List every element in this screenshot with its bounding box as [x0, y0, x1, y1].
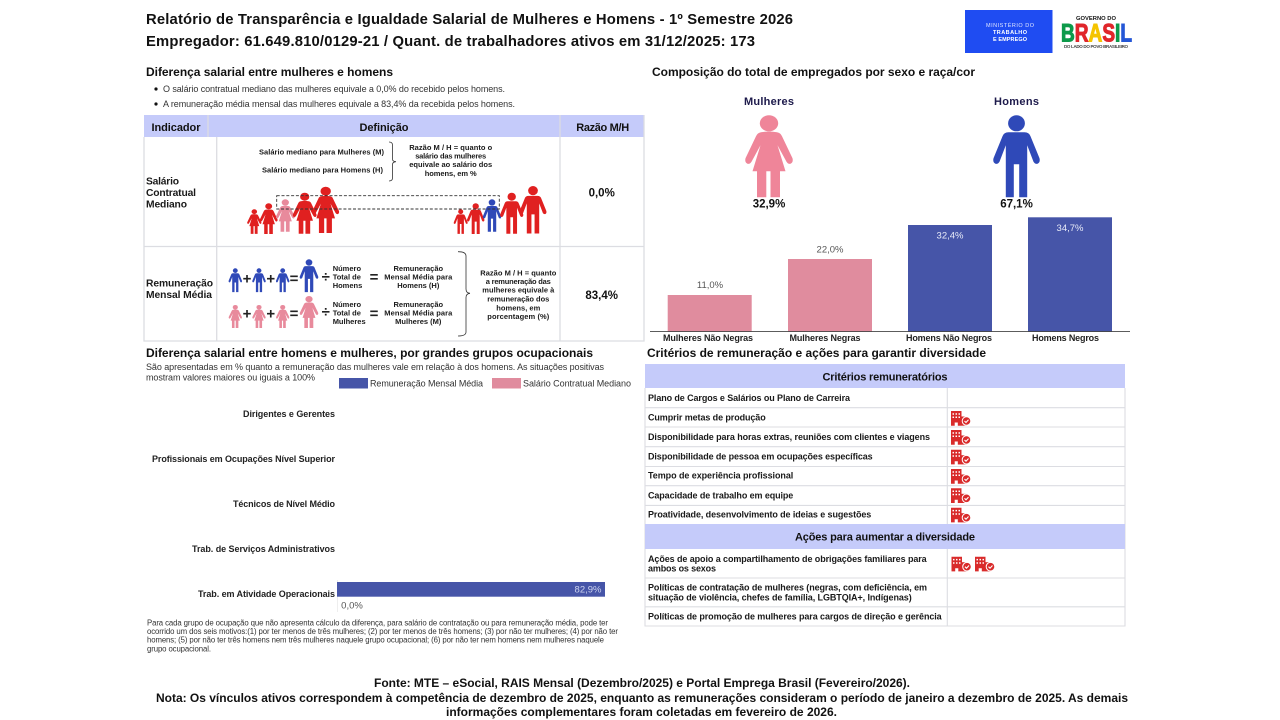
logo: Ministério do Trabalho e Emprego: E EMPREGO	[993, 37, 1028, 43]
bar chart: grupos ocupacionais: Trab. de Serviços Administrativos	[192, 544, 335, 554]
row: proatividade: Proatividade, desenvolvimento de ideias e sugestões	[648, 509, 871, 519]
header: critérios remuneratórios	[645, 364, 1125, 388]
equation: homens: Mensal Média para	[384, 272, 453, 282]
bar chart: grupos ocupacionais: Técnicos de Nível Médio	[233, 499, 336, 509]
icons: homens em fila	[454, 186, 546, 234]
footer: fonte e nota: Nota: Os vínculos ativos correspondem à competência de dezembro de 2025, enquanto as remunerações consideram o período de janeiro a dezembro de 2025. As demais	[156, 691, 1128, 705]
definition labels: salário mediano	[259, 147, 384, 175]
equation: homens: +	[266, 270, 275, 288]
row: trabalho em equipe	[648, 488, 971, 503]
logo: Ministério do Trabalho e Emprego: MINISTÉRIO DO	[986, 22, 1035, 29]
text block: razão salário: Razão M / H = quanto o	[409, 143, 493, 152]
equation: mulheres	[229, 296, 453, 328]
text block: resumo em bullets: O salário contratual mediano das mulheres equivale a 0,0% do recebido pelos homens.	[163, 84, 505, 94]
row: contratação de mulheres: Políticas de contratação de mulheres (negras, com deficiência, em	[648, 582, 927, 592]
bar: mulheres não negras: Mulheres Não Negras	[663, 333, 753, 343]
heading: critérios de remuneração: Critérios de remuneração e ações para garantir diversidade	[647, 346, 986, 360]
bar: mulheres negras: 22,0%	[817, 244, 844, 256]
equation: homens: Total de	[333, 272, 361, 282]
text block: razão remuneração: remuneração dos	[487, 294, 549, 303]
heading: composição: Composição do total de empregados por sexo e raça/cor	[652, 65, 975, 79]
title	[146, 12, 793, 50]
bracket: remuneração	[458, 252, 470, 336]
footnote	[147, 618, 618, 653]
equation: homens: Homens	[333, 281, 362, 290]
text block: razão remuneração: porcentagem (%)	[487, 312, 550, 321]
text block: razão remuneração	[480, 268, 557, 321]
bar: mulheres negras	[788, 244, 872, 343]
text block: razão salário: equivale ao salário dos	[409, 160, 492, 169]
figure: mulheres 32,9%: 32,9%	[753, 198, 785, 210]
header: ações para diversidade	[645, 524, 1125, 549]
bar: remuneração 82,9%	[337, 582, 605, 597]
logo: Governo do Brasil: GOVERNO DO	[1076, 16, 1116, 22]
bracket: salário mediano	[389, 142, 396, 181]
bar: homens negros: Homens Negros	[1032, 333, 1099, 343]
bar: mulheres negras: Mulheres Negras	[790, 333, 860, 343]
panel: tabela de indicadores	[144, 115, 644, 341]
footer: fonte e nota: informações complementares foram coletadas em fevereiro de 2026.	[446, 705, 837, 719]
row label: salário contratual mediano: Salário	[146, 176, 179, 188]
definition labels: salário mediano: Salário mediano para Mulheres (M)	[259, 147, 384, 156]
bar: homens negros: 34,7%	[1057, 223, 1084, 234]
logo: Governo do Brasil: BRASIL	[1061, 20, 1132, 48]
text block: razão remuneração: mulheres equivale à	[482, 286, 555, 295]
equation: mulheres: +	[243, 306, 252, 322]
text block: razão salário	[409, 143, 493, 178]
equation: homens: ÷	[322, 268, 330, 286]
title: Relatório de Transparência e Igualdade Salarial de Mulheres e Homens - 1º Semestre 2026	[146, 12, 793, 28]
row label: salário contratual mediano: Mediano	[146, 200, 187, 210]
equation: mulheres: ÷	[322, 304, 330, 320]
row label: remuneração mensal média	[146, 278, 213, 301]
equation: homens: =	[370, 269, 379, 286]
dashed highlight	[277, 196, 499, 209]
figure: homens 67,1%: Homens	[994, 96, 1039, 108]
row: tempo de experiência: Tempo de experiência profissional	[648, 471, 793, 481]
text block: razão remuneração: homens, em	[496, 303, 541, 312]
equation: mulheres: Total de	[333, 308, 361, 318]
panel: critérios e ações	[645, 364, 1125, 626]
header: critérios remuneratórios: Critérios remuneratórios	[822, 372, 948, 384]
text block: explicação: São apresentadas em % quanto a remuneração das mulheres vale em relação à dos homens. As situações positivas	[146, 362, 604, 372]
table header: Indicador	[152, 122, 201, 134]
bar: mulheres não negras: 11,0%	[697, 280, 724, 291]
row: ocupações específicas: Disponibilidade de pessoa em ocupações específicas	[648, 452, 873, 462]
logo: Governo do Brasil: DO LADO DO POVO BRASILEIRO	[1064, 44, 1128, 49]
value: razão salário: 0,0%	[589, 188, 615, 200]
equation: mulheres: Mulheres (M)	[395, 317, 442, 326]
equation: mulheres: =	[370, 306, 379, 322]
bar chart: grupos ocupacionais	[152, 409, 605, 612]
figure: homens 67,1%: 67,1%	[1000, 198, 1033, 210]
definition labels: salário mediano: Salário mediano para Homens (H)	[262, 166, 384, 175]
logo: Ministério do Trabalho e Emprego	[965, 10, 1052, 53]
footnote: homens; (5) por não ter três homens nem três mulheres naquele grupo ocupacional; (6) por não ter nem homens nem mulheres naquele	[147, 636, 604, 645]
row: compartilhamento de obrigações	[648, 554, 995, 573]
footnote: Para cada grupo de ocupação que não apresenta cálculo da diferença, para salário de contratação ou para remuneração média, pode ter	[147, 618, 608, 627]
bar chart: grupos ocupacionais: Dirigentes e Gerentes	[243, 409, 335, 419]
equation: homens: +	[243, 270, 252, 288]
text block: razão salário: salário das mulheres	[415, 152, 486, 160]
row: metas de produção	[648, 411, 971, 426]
header: ações para diversidade: Ações para aumentar a diversidade	[795, 532, 975, 544]
figure: homens 67,1%	[993, 96, 1040, 210]
equation: mulheres: =	[290, 306, 299, 322]
legend	[339, 378, 631, 388]
heading: diferença salarial: Diferença salarial entre mulheres e homens	[146, 65, 393, 79]
bar label: salário 0,0%: 0,0%	[341, 600, 363, 612]
value: razão remuneração: 83,4%	[585, 290, 618, 302]
bar chart: grupos ocupacionais: Profissionais em Ocupações Nível Superior	[152, 454, 335, 464]
footer: fonte e nota: Fonte: MTE – eSocial, RAIS Mensal (Dezembro/2025) e Portal Emprega Brasil (Fevereiro/2026).	[374, 676, 910, 690]
table header: Razão M/H	[576, 122, 629, 134]
row: horas extras	[648, 430, 971, 445]
legend: Salário Contratual Mediano	[523, 378, 631, 388]
heading: grandes grupos ocupacionais: Diferença salarial entre homens e mulheres, por grandes grupos ocupacionais	[146, 346, 593, 360]
row: proatividade	[648, 508, 971, 522]
row: compartilhamento de obrigações: Ações de apoio a compartilhamento de obrigações familiares para	[648, 554, 928, 564]
bar chart: grupos ocupacionais: Trab. em Atividade Operacionais	[198, 589, 335, 599]
bar: remuneração 82,9%: 82,9%	[575, 584, 602, 596]
bar: mulheres não negras	[663, 280, 753, 343]
text block: explicação	[146, 362, 604, 383]
row: plano de cargos: Plano de Cargos e Salários ou Plano de Carreira	[648, 393, 851, 403]
bar: homens não negros: Homens Não Negros	[906, 333, 992, 343]
figure: mulheres 32,9%: Mulheres	[744, 96, 794, 108]
row: horas extras: Disponibilidade para horas extras, reuniões com clientes e viagens	[648, 432, 930, 442]
table header	[152, 122, 629, 134]
row: compartilhamento de obrigações: ambos os sexos	[648, 563, 716, 573]
row label: salário contratual mediano: Contratual	[146, 188, 196, 199]
text block: resumo em bullets: A remuneração média mensal das mulheres equivale a 83,4% da recebida pelos homens.	[163, 99, 515, 109]
row: tempo de experiência	[648, 469, 971, 484]
footnote: ocorrido um dos seis motivos:(1) por ter menos de três mulheres; (2) por ter menos de três homens; (3) por não ter mulheres; (4) por não ter	[147, 627, 618, 636]
row label: remuneração mensal média: Mensal Média	[146, 290, 212, 301]
title: Empregador: 61.649.810/0129-21 / Quant. de trabalhadores ativos em 31/12/2025: 173	[146, 34, 755, 50]
equation: mulheres: Mulheres	[333, 317, 366, 326]
equation: mulheres: Número	[333, 300, 361, 309]
equation: mulheres: +	[266, 306, 275, 322]
footnote: grupo ocupacional.	[147, 644, 211, 653]
equation: mulheres: Remuneração	[393, 300, 444, 309]
bar chart: composição por sexo e raça/cor	[650, 217, 1130, 343]
equation: homens: Número	[333, 264, 361, 273]
bar: homens não negros: 32,4%	[937, 230, 964, 242]
equation: homens	[229, 259, 453, 292]
text block: razão salário: homens, em %	[425, 169, 477, 178]
bar: homens negros	[1028, 217, 1112, 343]
equation: homens: =	[290, 270, 299, 288]
footer: fonte e nota	[156, 676, 1128, 719]
icons: mulheres em fila	[247, 187, 339, 234]
logo: Ministério do Trabalho e Emprego: TRABALHO	[993, 30, 1028, 36]
row label: remuneração mensal média: Remuneração	[146, 278, 213, 290]
row: metas de produção: Cumprir metas de produção	[648, 413, 766, 423]
row: contratação de mulheres	[648, 582, 927, 602]
text block: resumo em bullets	[154, 84, 515, 109]
equation: homens: Homens (H)	[397, 281, 440, 290]
text block: razão remuneração: a remuneração das	[486, 277, 551, 286]
text block: razão remuneração: Razão M / H = quanto	[480, 268, 557, 277]
bar: homens não negros	[906, 225, 992, 343]
row label: salário contratual mediano	[146, 176, 196, 210]
text block: explicação: mostram valores maiores ou iguais a 100%	[146, 373, 315, 383]
equation: homens: Remuneração	[393, 264, 444, 273]
row: ocupações específicas	[648, 450, 971, 464]
table header: Definição	[360, 122, 409, 134]
figure: mulheres 32,9%	[744, 96, 794, 210]
equation: mulheres: Mensal Média para	[384, 308, 453, 318]
row: contratação de mulheres: situação de violência, chefes de família, LGBTQIA+, Indígenas)	[648, 592, 912, 602]
row: promoção de mulheres: Políticas de promoção de mulheres para cargos de direção e gerência	[648, 612, 943, 622]
legend: Remuneração Mensal Média	[370, 378, 483, 388]
row: trabalho em equipe: Capacidade de trabalho em equipe	[648, 490, 793, 500]
